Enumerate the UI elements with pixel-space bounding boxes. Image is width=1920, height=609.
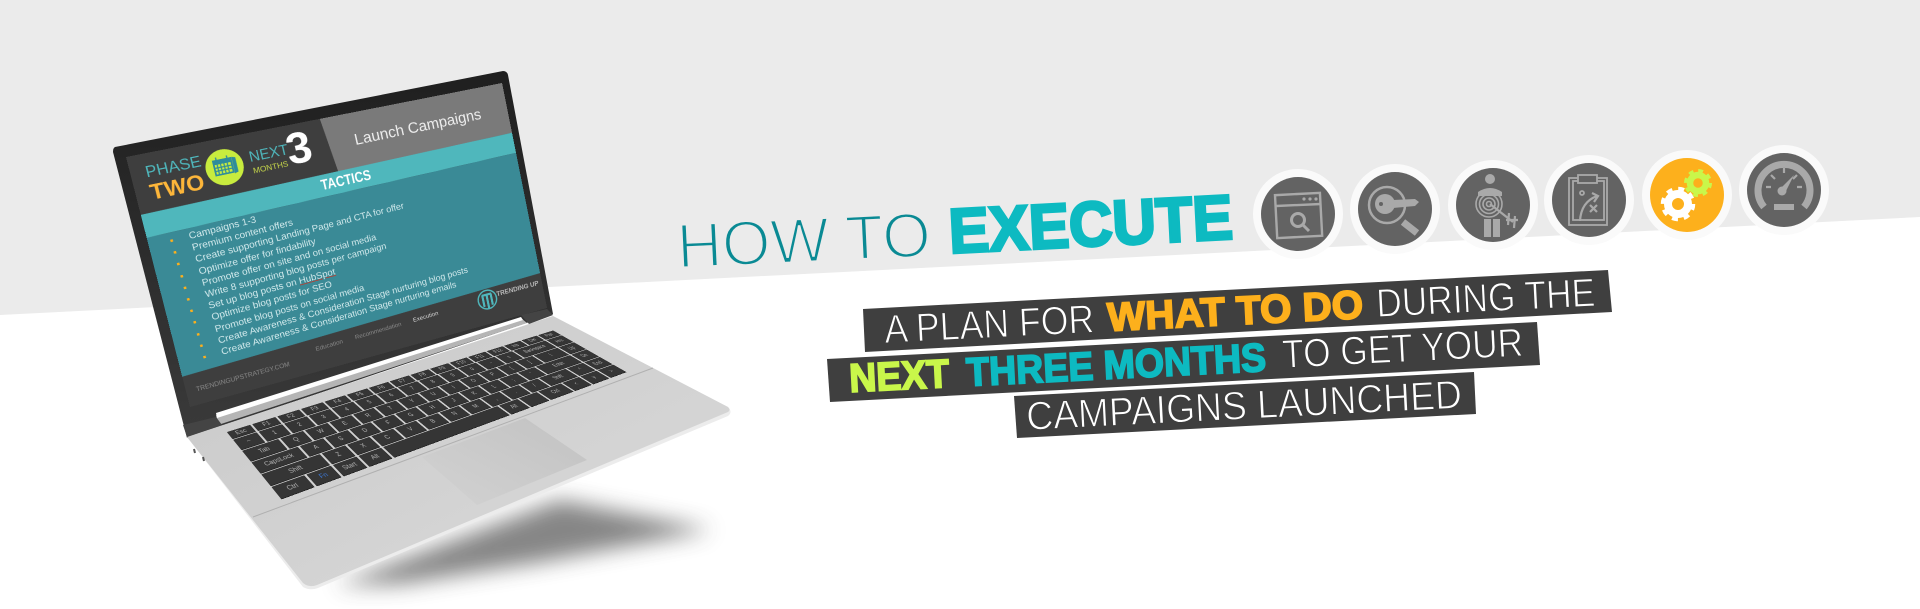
icon: keyword search key <box>1350 164 1440 254</box>
laptop keyboard: Q <box>291 436 301 443</box>
laptop keyboard: 3 <box>319 414 327 419</box>
laptop keyboard: Esc <box>234 427 248 436</box>
slide heading: tactics: TACTICS <box>319 167 373 194</box>
laptop keyboard: S <box>336 435 345 442</box>
slide footer: navigation: Education Recommendation Execution <box>315 310 439 352</box>
banner line 3: CAMPAIGNS LAUNCHED <box>1025 373 1463 439</box>
laptop keyboard: Shift <box>550 373 565 380</box>
laptop keyboard: F2 <box>285 412 296 419</box>
laptop keyboard: B <box>428 418 437 424</box>
slide bullet list: Promote blog posts on social media <box>213 282 365 334</box>
slide bullet list: Write 8 supporting blog posts per campaign <box>204 241 387 300</box>
laptop keyboard: F8 <box>417 372 428 377</box>
laptop keyboard: F1 <box>261 420 272 427</box>
laptop keyboard: K <box>469 390 478 396</box>
icon: browser search <box>1253 169 1343 259</box>
icon: speedometer <box>1739 145 1829 235</box>
laptop base <box>183 309 730 590</box>
laptop keyboard: F4 <box>332 398 343 404</box>
laptop keyboard: ] <box>526 360 533 364</box>
laptop keyboard: ' <box>528 371 535 375</box>
laptop keyboard: [ <box>508 366 515 370</box>
slide logo: two: TWO <box>147 170 207 205</box>
laptop keyboard: D <box>360 427 369 433</box>
title: how to execute <box>675 158 1806 280</box>
laptop keyboard: C <box>382 434 392 440</box>
laptop keyboard: v <box>590 375 598 379</box>
slide footer: brand logo: TRENDING UP <box>496 279 539 298</box>
laptop keyboard: F7 <box>397 378 408 384</box>
laptop keyboard: Fn <box>317 471 330 480</box>
laptop keyboard: 6 <box>387 392 395 397</box>
slide logo: months: MONTHS <box>252 160 289 176</box>
banner line 1: DURING THE <box>1375 271 1596 326</box>
laptop keyboard: Start <box>340 461 359 471</box>
laptop illustration <box>113 71 730 600</box>
laptop keyboard: H <box>428 404 437 410</box>
laptop keyboard: U <box>429 391 438 396</box>
banner line 1: A PLAN FOR <box>883 297 1095 352</box>
laptop keyboard: G <box>406 412 415 418</box>
laptop keyboard: F5 <box>354 391 365 397</box>
laptop keyboard: 5 <box>365 399 373 405</box>
slide logo: phase two: PHASE <box>144 153 203 181</box>
laptop keyboard: . <box>512 390 519 394</box>
laptop keyboard: Alt <box>369 453 381 461</box>
laptop keyboard: 4 <box>343 406 351 412</box>
laptop keyboard: / <box>531 383 538 387</box>
slide bullet list: Create supporting Landing Page and CTA for offer <box>194 201 405 265</box>
laptop keyboard: 9 <box>449 373 457 377</box>
banner line 2: THREE MONTHS <box>965 336 1267 395</box>
laptop keyboard: L <box>489 384 498 389</box>
slide bullet list: Set up blog posts on HubSpot <box>207 266 336 311</box>
slide heading: launch campaigns: Launch Campaigns <box>353 106 483 149</box>
laptop keyboard: F9 <box>437 366 447 371</box>
slide bullet list <box>170 201 469 358</box>
laptop keyboard: I <box>450 385 457 389</box>
slide bullet list: Optimize blog posts for SEO <box>210 279 333 323</box>
laptop keyboard: O <box>469 378 478 383</box>
laptop keyboard <box>227 330 626 500</box>
laptop keyboard: Enter <box>550 361 567 368</box>
laptop keyboard: R <box>363 412 372 418</box>
laptop keyboard: Up <box>566 345 577 351</box>
laptop keyboard: \ <box>547 353 554 357</box>
icon: calendar <box>205 149 244 186</box>
laptop keyboard: ; <box>509 377 516 382</box>
laptop keyboard: < <box>572 381 581 386</box>
banner line 2: NEXT <box>848 352 950 401</box>
laptop keyboard: J <box>449 397 458 403</box>
laptop keyboard: Ins <box>510 343 521 348</box>
laptop keyboard: 7 <box>408 385 416 391</box>
laptop keyboard: 1 <box>270 429 278 435</box>
laptop keyboard: P <box>488 372 497 377</box>
laptop screen slide <box>126 83 547 407</box>
laptop keyboard: X <box>358 442 368 449</box>
laptop keyboard: A <box>311 444 320 450</box>
laptop keyboard: Hm <box>553 338 565 343</box>
laptop keyboard: F3 <box>309 405 320 412</box>
subheading banner <box>827 270 1612 439</box>
laptop keyboard: Backspace <box>522 344 547 354</box>
laptop keyboard: > <box>607 369 616 373</box>
laptop keyboard: F11 <box>473 354 486 359</box>
banner line 1: WHAT TO DO <box>1106 283 1364 340</box>
laptop keyboard: 8 <box>429 379 437 384</box>
slide logo: next: NEXT <box>247 142 290 165</box>
laptop keyboard: F6 <box>376 384 387 390</box>
laptop keyboard: F12 <box>491 348 504 354</box>
slide panels <box>141 83 540 377</box>
laptop keyboard: F <box>384 419 392 425</box>
process icon row <box>1253 145 1829 251</box>
slide bullet list: Premium content offers <box>191 217 294 253</box>
laptop keyboard: E <box>340 420 349 426</box>
laptop keyboard: End <box>591 360 604 366</box>
laptop keyboard: Ctrl <box>285 482 300 491</box>
laptop keyboard: 0 <box>468 366 476 371</box>
laptop keyboard: - <box>487 361 494 365</box>
laptop keyboard: N <box>450 410 459 416</box>
laptop keyboard: Z <box>334 451 343 457</box>
laptop keyboard: Ctrl <box>549 388 562 395</box>
banner line 2: TO GET YOUR <box>1281 321 1524 377</box>
banner line 1 <box>863 270 1612 352</box>
title: how to: HOW TO <box>675 200 932 280</box>
slide bullet list: Create Awareness & Consideration Stage nurturing emails <box>220 279 457 357</box>
laptop keyboard: CapsLock <box>262 452 295 467</box>
laptop keyboard: Del <box>526 337 538 343</box>
laptop keyboard: Shift <box>287 464 304 474</box>
laptop keyboard: , <box>492 396 499 401</box>
laptop keyboard: 2 <box>295 421 303 427</box>
icon: strategy clipboard <box>1544 155 1634 245</box>
slide footer: website: TRENDINGUPSTRATEGY.COM <box>195 361 290 393</box>
laptop keyboard: M <box>470 403 480 409</box>
icon: target persona <box>1448 160 1538 250</box>
laptop keyboard: = <box>505 355 513 359</box>
banner line 2 <box>827 321 1540 402</box>
laptop lid and shadow <box>113 71 710 600</box>
laptop keyboard: Y <box>408 398 417 403</box>
slide bullet list: Campaigns 1-3 <box>187 214 257 241</box>
slide logo: number 3: 3 <box>281 121 317 174</box>
icon: gears, active step <box>1642 150 1732 240</box>
slide bullet list: Optimize offer for findability <box>197 235 317 277</box>
slide bullet list: Create Awareness & Consideration Stage nurturing blog posts <box>217 264 469 346</box>
laptop keyboard: Dn <box>579 353 590 358</box>
slide footer: brand logo <box>477 279 539 310</box>
laptop keyboard: ~ <box>245 437 253 444</box>
laptop keyboard: W <box>315 428 326 434</box>
laptop keyboard: Alt <box>508 403 520 409</box>
laptop keyboard: V <box>406 426 415 432</box>
laptop keyboard: F10 <box>455 359 468 365</box>
laptop keyboard: Tab <box>257 445 271 454</box>
laptop keyboard: Pwr <box>543 332 555 338</box>
slide bullet list: Promote offer on site and on social media <box>201 231 377 288</box>
laptop keyboard: ^ <box>576 367 585 371</box>
laptop keyboard: T <box>386 405 395 411</box>
